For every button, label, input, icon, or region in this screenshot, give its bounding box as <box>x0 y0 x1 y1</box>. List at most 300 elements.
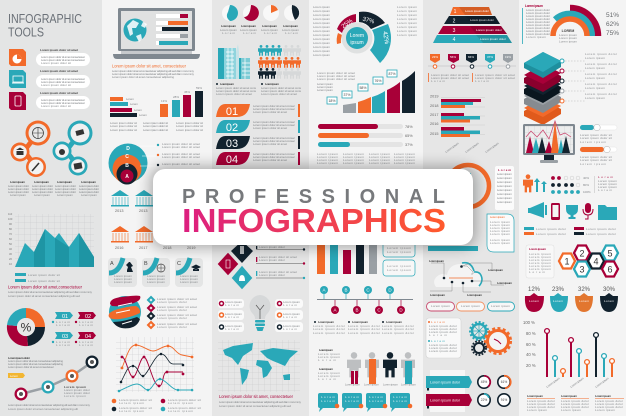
panel: area chart: Lorem ipsum dolor sit amet consectetuer adipiscing elit sed diam nonummy <box>8 290 93 294</box>
temple timeline: 2013 <box>139 209 147 213</box>
bulb pills: Lorem <box>283 327 298 331</box>
outlined pills <box>426 302 514 311</box>
panel: percent shields: Lorem <box>553 299 564 303</box>
arrow labels: Lorem <box>79 323 94 327</box>
radial segments: 37% <box>362 17 375 26</box>
temple timeline: 2013 <box>115 209 123 213</box>
panel: A B C cards: Lorem ipsum <box>114 274 132 278</box>
hexagon note card: Lorem ipsum <box>529 247 546 251</box>
panel: progress bars: Lorem ipsum <box>394 155 416 159</box>
panel: isometric layers: Lorem ipsum dolor <box>585 92 617 96</box>
panel: flag markers: Lorem ipsum dolor sit amet <box>431 76 469 80</box>
people text: Lorem ipsum dolor sit amet <box>216 92 252 96</box>
tool list text: Lorem ipsum dolor sit amet consectetuer <box>41 98 85 102</box>
temple timeline: 2017 <box>139 246 147 250</box>
panel: grouped bars by year: 2016 <box>430 122 438 126</box>
panel: grouped bars by year <box>430 94 500 154</box>
panel: numbered list: Lorem ipsum dolor sit amet <box>253 158 287 162</box>
figure 1 <box>347 352 361 384</box>
panel: speech bubbles: Lorem <box>345 399 360 403</box>
step value labels: 18% <box>328 99 336 103</box>
panel: person and dot rating: Lorem ipsum <box>598 179 618 183</box>
tool list text: Lorem ipsum dolor sit amet consectetuer <box>41 58 85 62</box>
semicircle caption: LOREM <box>562 29 574 33</box>
panel: person and dot rating: Lorem ipsum <box>598 182 618 186</box>
banner shadow <box>150 166 476 248</box>
figure 4 <box>401 352 415 384</box>
panel: flag markers: 37% <box>487 55 493 59</box>
panel: area chart: Lorem ipsum dolor sit amet,consectetuer <box>8 284 83 290</box>
side text: Lorem ipsum <box>397 29 418 33</box>
bar chart text <box>110 121 203 132</box>
caption columns: Lorem ipsum dolor <box>79 190 99 194</box>
panel: flag markers: Lorem ipsum dolor sit amet <box>431 73 469 77</box>
panel: person and dot rating: Lorem <box>598 175 614 179</box>
panel: alternating timeline <box>313 286 414 335</box>
panel: percent shields: 23% <box>552 287 565 293</box>
panel: progress bars: Lorem ipsum <box>394 152 416 156</box>
side text: Lorem ipsum <box>397 5 418 9</box>
icon row: Lorem ipsum dolor <box>586 227 616 231</box>
panel: progress bars: Lorem ipsum <box>343 161 364 165</box>
panel: isometric layers: Lorem ipsum <box>585 96 606 100</box>
panel: A B C cards: Lorem ipsum <box>114 280 132 284</box>
cloud labels: Lorem ipsum <box>429 259 444 263</box>
panel: alternating timeline: Lorem ipsum <box>352 320 368 324</box>
note card with teal outline: Lorem ipsum <box>490 220 510 224</box>
icon row <box>524 202 617 236</box>
panel: gears <box>426 318 511 358</box>
bar chart text: Lorem ipsum dolor sit <box>143 128 168 132</box>
note card with teal outline: Lorem ipsum <box>490 229 510 233</box>
icon: cloud <box>434 263 482 287</box>
panel: A B C cards: B <box>144 261 148 267</box>
panel: area chart: 110 <box>8 212 13 216</box>
panel: diamond list: Lorem ipsum dolor <box>259 258 285 262</box>
arrow labels: 04 <box>85 334 91 340</box>
figure captions <box>318 348 417 386</box>
panel: progress bars: 65% <box>405 134 413 138</box>
icon: teal laptop tile <box>9 70 26 88</box>
radial segments: ipsum <box>350 40 364 46</box>
arrow labels: 01 <box>62 314 68 320</box>
semicircle intro: Lorem ipsum dolor <box>526 32 550 36</box>
icon: gears <box>470 322 511 355</box>
caption columns: Lorem ipsum dolor <box>79 187 99 191</box>
caption columns: Lorem ipsum <box>81 193 98 197</box>
panel: pyramid: Lorem ipsum dolor <box>465 9 489 13</box>
line chart legend: Lorem ipsum dolor sit <box>168 406 201 410</box>
panel: stepped growth chart <box>317 70 415 113</box>
panel: numbered list: Lorem ipsum dolor sit amet consec <box>253 139 296 143</box>
panel: numbered list: Lorem ipsum dolor sit amet consec <box>253 107 296 111</box>
bar chart text: Lorem ipsum dolor sit <box>176 124 203 128</box>
bulb pills: Lorem ipsum <box>225 312 242 316</box>
panel: progress bars: Lorem ipsum <box>343 158 364 162</box>
panel: grouped bars by year: 2015 <box>430 132 438 136</box>
concentric circles chart: Lorem ipsum dolor sit amet <box>162 145 200 149</box>
temple timeline: 2019 <box>187 246 195 250</box>
caption columns <box>8 180 99 197</box>
bar chart text: Lorem ipsum dolor sit <box>176 128 203 132</box>
lollipop labels <box>527 376 624 412</box>
panel: person and dot rating <box>523 174 618 194</box>
panel: pie charts: Lorem ipsum <box>282 28 300 32</box>
side text: Lorem ipsum <box>313 21 330 25</box>
people text <box>216 82 302 96</box>
people text: Lorem ipsum dolor sit amet cons <box>216 86 256 90</box>
bulb pills: Lorem ipsum <box>283 312 300 316</box>
lollipop axis: 60 % <box>526 342 536 347</box>
arrow labels: Lorem <box>56 343 70 347</box>
panel: arrows and rings: 91% <box>501 398 507 402</box>
arrow labels: Lorem <box>79 343 94 347</box>
panel: flag markers: 19% <box>505 55 511 59</box>
panel: isometric layers: Lorem ipsum <box>585 66 606 70</box>
hexagon numbers <box>564 248 613 274</box>
ring chart note card: Lorem ipsum <box>497 176 512 180</box>
crimson series <box>121 356 184 387</box>
panel: striped sphere: Lorem ipsum dolor <box>157 325 187 329</box>
panel: numbered list: Lorem ipsum dolor sit amet <box>253 126 287 130</box>
concentric circles chart: B <box>125 163 129 169</box>
panel: person and dot rating: 40% <box>583 176 589 180</box>
panel: striped sphere: Lorem ipsum dolor sit amet <box>157 322 197 326</box>
panel: body figures <box>318 348 417 386</box>
lollipop labels: Lorem ipsum <box>545 376 561 389</box>
gears text card: Lorem ipsum dolor <box>429 324 457 328</box>
caption columns: Lorem ipsum <box>10 193 26 197</box>
panel: isometric layers: Lorem ipsum <box>585 56 606 60</box>
panel: colored columns: Lorem ipsum <box>387 264 412 268</box>
line chart legend: Lorem ipsum dolor sit <box>119 406 152 410</box>
step bars <box>343 71 415 113</box>
gears text card: Lorem ipsum dolor <box>429 327 457 331</box>
panel: A B C cards: Lorem ipsum <box>180 274 198 278</box>
vertical bars: 28% <box>173 95 179 99</box>
caption columns: Lorem ipsum dolor <box>55 190 76 194</box>
side text: Lorem ipsum <box>397 13 418 17</box>
laptop text: Lorem ipsum dolor sit amet consectetuer adipiscing elit sed diam nonummy <box>112 72 194 76</box>
lollipop sticks <box>545 329 614 377</box>
semicircle intro <box>522 4 550 44</box>
tool list text: Lorem ipsum dolor sit amet <box>40 48 78 52</box>
title: infographic tools: INFOGRAPHIC <box>8 12 82 26</box>
panel: numbered list <box>216 104 300 166</box>
side text: Lorem ipsum <box>313 37 330 41</box>
cloud labels <box>429 259 512 297</box>
cloud labels: Lorem ipsum <box>488 268 503 272</box>
panel: arrows and rings <box>426 370 511 412</box>
panel: striped sphere: Lorem ipsum dolor <box>157 308 187 312</box>
panel: speech bubbles: Lorem <box>321 399 336 403</box>
temple timeline: 2016 <box>115 246 123 250</box>
ring chart note card <box>495 166 514 210</box>
panel: flag markers: Lorem ipsum dolor sit amet <box>475 76 515 80</box>
panel: isometric layers: Lorem ipsum dolor <box>585 82 617 86</box>
panel: pie charts <box>220 5 300 35</box>
panel: semicircle percentages <box>522 4 619 44</box>
panel: numbered list: Lorem ipsum dolor sit amet consec <box>253 104 296 108</box>
panel: arrows and rings: Lorem ipsum dolor <box>430 398 461 402</box>
panel: alternating timeline: Lorem ipsum dolor <box>313 327 345 331</box>
panel: pie charts: Lorem ipsum <box>221 24 236 28</box>
panel: alternating timeline: Lorem ipsum dolor <box>313 331 345 335</box>
tool list text: Lorem ipsum dolor sit <box>41 83 71 87</box>
panel: speech bubbles <box>318 393 412 412</box>
panel: A B C cards: Lorem ipsum <box>180 280 198 284</box>
panel: colored columns: Lorem ipsum <box>387 268 412 272</box>
line chart legend: Lorem ipsum dolor sit <box>168 398 201 402</box>
panel: pyramid: Lorem ipsum dolor <box>470 18 494 22</box>
panel: progress bars: Lorem ipsum <box>343 152 364 156</box>
panel: alternating timeline: A <box>333 308 337 312</box>
hexagon numbers: 1 <box>564 256 570 266</box>
panel: flag markers: Lorem ipsum dolor sit amet <box>475 73 515 77</box>
side text: Lorem ipsum <box>313 49 330 53</box>
monitor <box>523 121 575 163</box>
side text: Lorem ipsum <box>313 29 330 33</box>
figure captions: Lorem ipsum <box>319 348 333 352</box>
step value labels: 76% <box>374 79 382 83</box>
hexagon note card: Lorem ipsum <box>529 255 552 259</box>
arrow labels: Lorem <box>56 323 70 327</box>
line chart legend: Lorem ipsum <box>119 401 144 405</box>
side text: Lorem ipsum <box>313 5 330 9</box>
panel: segmented radial chart <box>313 5 418 63</box>
panel: area chart: 40 <box>9 247 12 251</box>
bar chart text: Lorem ipsum dolor sit <box>110 128 137 132</box>
semicircle intro: Lorem ipsum dolor <box>526 20 550 24</box>
line chart legend: Lorem ipsum <box>168 401 194 405</box>
sliders: Lorem ipsum dolor sit <box>580 158 612 162</box>
lollipop axis: 100 % <box>523 320 535 325</box>
horizontal bars: Lorem <box>126 97 134 101</box>
figure captions: Lorem ipsum <box>345 382 361 386</box>
arrow labels: Lorem <box>79 340 94 344</box>
sliders: Lorem ipsum dolor sit <box>580 136 612 140</box>
panel: rising timeline: Lorem ipsum <box>64 394 86 398</box>
panel: pie charts: Lorem ipsum <box>220 28 238 32</box>
panel: progress bars: Lorem ipsum <box>369 161 390 165</box>
panel: monitor chart <box>523 121 617 166</box>
panel: area chart: 60 <box>9 237 12 241</box>
panel: striped sphere <box>109 296 197 329</box>
tool list text: Lorem ipsum dolor sit amet consectetuer <box>41 77 85 81</box>
caption columns: Lorem ipsum <box>81 180 96 184</box>
ring chart note card: Lorem ipsum <box>497 196 512 200</box>
panel: area chart: 20 <box>9 257 12 261</box>
figure captions: Lorem ipsum <box>383 382 399 386</box>
note card with teal outline <box>428 214 514 252</box>
panel: area chart: 50 <box>9 242 12 246</box>
ring chart note card: Lorem <box>498 168 511 172</box>
connected circles: orange <box>10 120 50 177</box>
cloud labels: Lorem ipsum <box>497 281 512 285</box>
panel: numbered list: Lorem ipsum dolor sit amet <box>253 142 287 146</box>
panel: progress bars: Lorem ipsum <box>317 152 338 156</box>
icon: bulb <box>250 295 270 331</box>
figure 2 <box>365 352 379 384</box>
panel: alternating timeline: Lorem ipsum dolor <box>348 331 380 335</box>
step text: Lorem ipsum dolor sit amet <box>317 77 355 81</box>
panel: percent shields: 32% <box>578 287 591 293</box>
semicircle caption: Lorem ipsum <box>559 36 578 40</box>
panel: diamond list: Lorem ipsum dolor <box>259 245 285 249</box>
figure captions: Lorem ipsum <box>401 382 417 386</box>
figure captions: Lorem <box>318 358 336 362</box>
side text: Lorem ipsum <box>313 17 330 21</box>
semicircle caption: Lorem ipsum <box>559 40 578 44</box>
donut chart: % <box>21 320 32 334</box>
arrow labels: 02 <box>85 314 91 320</box>
radial segments: Lorem <box>350 33 364 39</box>
figure captions: Lorem ipsum <box>318 352 340 356</box>
side text: Lorem ipsum <box>313 33 330 37</box>
ring chart note card: Lorem ipsum <box>497 184 512 188</box>
tool list text: Lorem ipsum dolor sit <box>41 104 71 108</box>
map heading: Lorem ipsum dolor sit amet, consectetuer <box>219 394 294 399</box>
semicircle caption: Lorem ipsum <box>559 33 578 37</box>
icon row: Lorem ipsum dolor <box>586 232 616 236</box>
panel: pyramid: 3 <box>453 28 456 34</box>
panel: alternating timeline: B <box>344 288 348 292</box>
radial segments: 42% <box>381 31 390 45</box>
people text: Lorem ipsum <box>265 82 279 86</box>
panel: progress bars <box>317 124 416 165</box>
side text: Lorem ipsum <box>397 21 418 25</box>
panel: area chart: 90 <box>9 222 12 226</box>
hexagon note card: Lorem ipsum <box>529 258 552 262</box>
panel: A B C cards: Lorem ipsum <box>114 277 132 281</box>
panel: pyramid <box>433 7 512 43</box>
semicircle caption <box>559 29 578 44</box>
bulb pills: Lorem ipsum <box>283 300 300 304</box>
panel: percent shields: Lorem <box>604 299 614 303</box>
panel: striped sphere: Lorem ipsum dolor sit amet <box>157 297 197 301</box>
panel: numbered list: 03 <box>226 138 238 150</box>
panel: area chart: 70 <box>9 232 12 236</box>
panel: striped sphere: Lorem ipsum dolor sit amet <box>157 305 197 309</box>
step value boxes <box>327 70 397 104</box>
hexagon note card: Lorem ipsum <box>529 264 552 268</box>
hexagon note card: Lorem ipsum <box>529 261 552 265</box>
panel: flag markers: 23% <box>432 55 438 59</box>
horizontal bars: Lorem <box>130 102 138 106</box>
figure captions: Lorem ipsum <box>319 367 333 371</box>
panel: A B C cards: Lorem ipsum <box>147 277 166 281</box>
bulb pills: Lorem ipsum <box>225 300 242 304</box>
side text: Lorem ipsum <box>313 41 330 45</box>
hexagon numbers: 5 <box>607 248 613 258</box>
panel: rising timeline: Lorem ipsum dolor <box>64 391 90 395</box>
horizontal bars <box>110 97 148 117</box>
panel: A B C cards: C <box>177 261 181 267</box>
outlined pills: Lorem ipsum <box>491 304 510 308</box>
concentric circles chart: Lorem ipsum dolor sit amet <box>162 152 200 156</box>
tool list text: Lorem ipsum dolor sit amet consectetuer <box>41 55 85 59</box>
panel: alternating timeline: C <box>366 288 370 292</box>
caption columns: Lorem ipsum dolor <box>32 187 53 191</box>
panel: progress bars: Lorem ipsum <box>394 158 416 162</box>
panel: person and dot rating: Lorem <box>598 188 612 192</box>
tool list text: Lorem ipsum dolor sit amet consectetuer <box>41 101 85 105</box>
orange ring chart <box>447 165 489 207</box>
vertical bars <box>160 86 203 117</box>
panel: numbered list: Lorem ipsum dolor sit amet consec <box>253 136 296 140</box>
line chart legend: Lorem ipsum dolor sit <box>119 398 152 402</box>
panel: flag markers: Lorem <box>431 79 446 83</box>
panel: alternating timeline: D <box>388 288 392 292</box>
panel: numbered list: Lorem ipsum dolor sit amet <box>253 110 287 114</box>
icon: crimson phone tile <box>9 92 26 110</box>
panel: grouped bars by year: 2017 <box>430 113 438 117</box>
panel: pyramid: 4 <box>453 37 456 43</box>
outlined pills: Lorem ipsum <box>431 304 450 308</box>
semicircle intro: Lorem ipsum dolor <box>526 17 550 21</box>
hexagon numbers: 4 <box>593 256 599 266</box>
panel: numbered list: 01 <box>226 106 238 118</box>
ring chart note card: Lorem ipsum <box>497 192 512 196</box>
people text: Lorem ipsum dolor sit amet cons <box>261 89 302 93</box>
panel: progress bars: Lorem ipsum <box>369 152 390 156</box>
semicircle intro: Lorem ipsum dolor <box>526 23 550 27</box>
map text: Lorem ipsum dolor sit amet consectetuer adipiscing elit sed diam nonummy <box>219 400 302 404</box>
hexagon note card: Lorem ipsum <box>529 252 552 256</box>
panel: A B C cards: Lorem ipsum <box>147 274 166 278</box>
tool list text: Lorem ipsum dolor sit amet consectetuer <box>41 80 85 84</box>
panel: isometric layers: Lorem ipsum <box>585 76 606 80</box>
panel: arrows and rings: Lorem ipsum dolor <box>430 380 461 384</box>
panel: pyramid: 2 <box>453 18 456 24</box>
gears text card: Lorem <box>431 320 446 324</box>
lollipop labels: Lorem ipsum <box>527 408 548 412</box>
ring chart note card: Lorem ipsum <box>497 180 512 184</box>
lollipop labels: Lorem ipsum dolor <box>595 405 623 409</box>
people text: Lorem ipsum dolor sit amet cons <box>261 86 302 90</box>
semicircle intro: Lorem ipsum dolor <box>526 26 550 30</box>
panel: rising timeline <box>8 356 98 411</box>
note card with teal outline: Lorem ipsum <box>490 215 506 219</box>
panel: speech bubbles: Lorem <box>369 399 384 403</box>
caption columns: Lorem ipsum <box>57 180 72 184</box>
sliders: Lorem ipsum dolor sit <box>580 133 612 137</box>
continents <box>223 343 298 385</box>
lollipop labels: Lorem ipsum dolor <box>561 402 589 406</box>
panel: progress bars: 37% <box>405 143 413 147</box>
panel: rising timeline: Lorem ipsum dolor sit amet consectetuer adipiscing <box>8 359 63 363</box>
ring chart note card: Lorem ipsum <box>497 200 512 204</box>
panel: progress bars: Lorem ipsum <box>317 158 338 162</box>
lollipop labels: Lorem ipsum dolor <box>561 399 589 403</box>
hexagon numbers: 2 <box>579 248 585 258</box>
panel: infographic tools <box>8 12 99 197</box>
panel: area chart: 80 <box>9 227 12 231</box>
concentric circles chart: Lorem ipsum dolor sit amet <box>162 162 200 166</box>
panel: isometric layers: Lorem ipsum dolor <box>585 72 617 76</box>
concentric circles chart <box>108 142 200 184</box>
lollipop axis: 40 % <box>526 352 536 357</box>
sliders: Lorem ipsum <box>580 162 606 166</box>
panel: grouped bars by year: 2018 <box>430 104 438 108</box>
panel: pie charts: Lorem ipsum <box>262 24 277 28</box>
panel: world map <box>218 340 302 408</box>
step value labels: 58% <box>359 86 367 90</box>
panel: numbered list: Lorem ipsum dolor sit amet consec <box>253 155 296 159</box>
panel: rising timeline: Lorem ipsum dolor sit amet consectetuer <box>8 365 54 369</box>
gears text card: Lorem <box>431 339 446 343</box>
bar chart text: Lorem ipsum dolor sit <box>176 121 203 125</box>
